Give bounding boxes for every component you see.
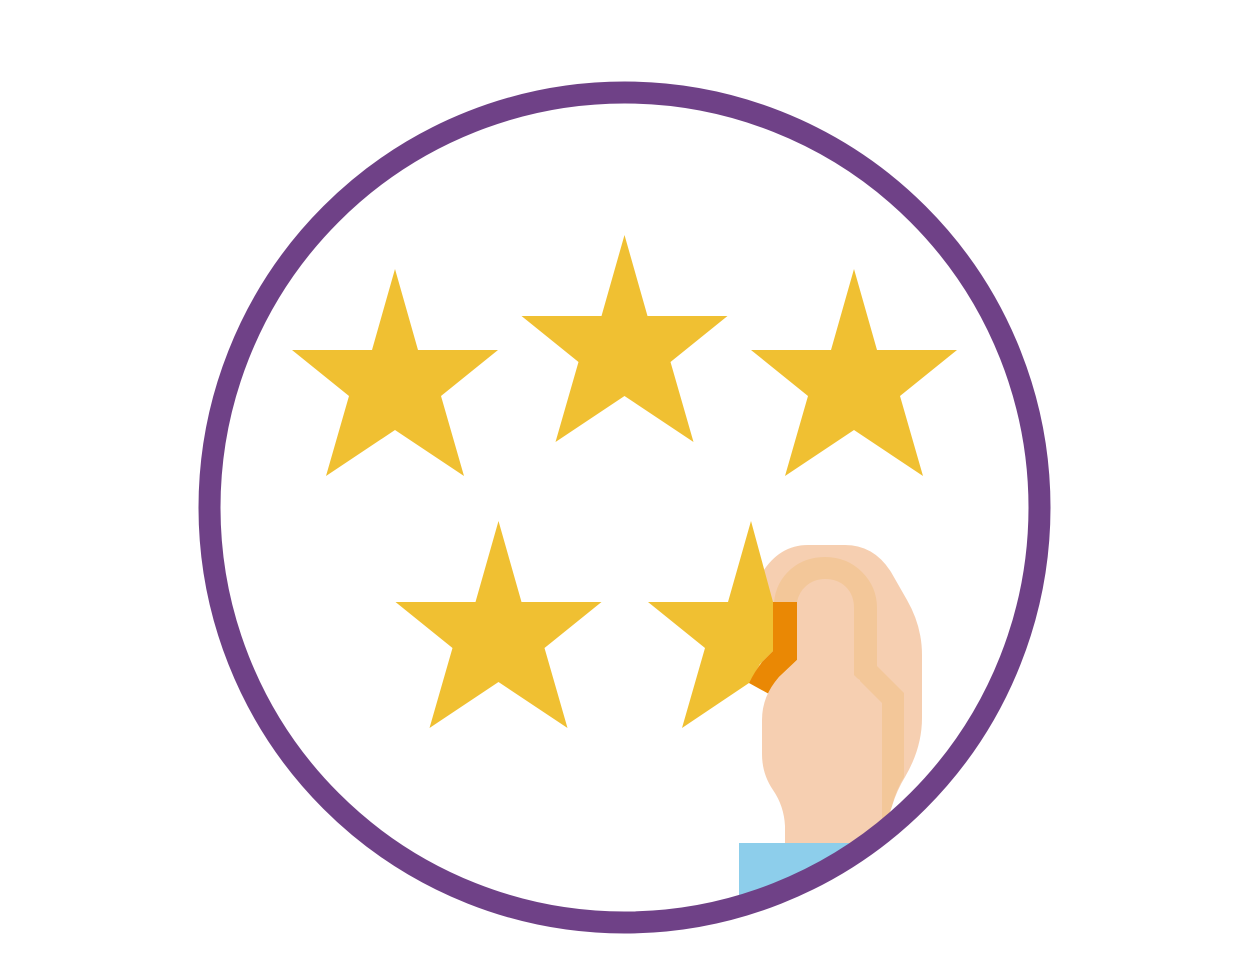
finger shadow band <box>774 557 904 830</box>
infographic: five star rating icon <box>198 82 1050 934</box>
fingertip press highlight <box>749 602 797 694</box>
shirt cuff <box>739 843 850 895</box>
icon: hand pressing fifth star <box>648 521 922 913</box>
front finger and thumb <box>762 579 882 860</box>
star: bottom right, partly covered <box>648 521 773 728</box>
star: top right <box>751 269 957 476</box>
star: top left <box>292 269 498 476</box>
star: top centre <box>522 235 728 442</box>
star: bottom left <box>396 521 602 728</box>
finger back shape <box>764 545 922 812</box>
purple circle ring <box>210 92 1040 922</box>
